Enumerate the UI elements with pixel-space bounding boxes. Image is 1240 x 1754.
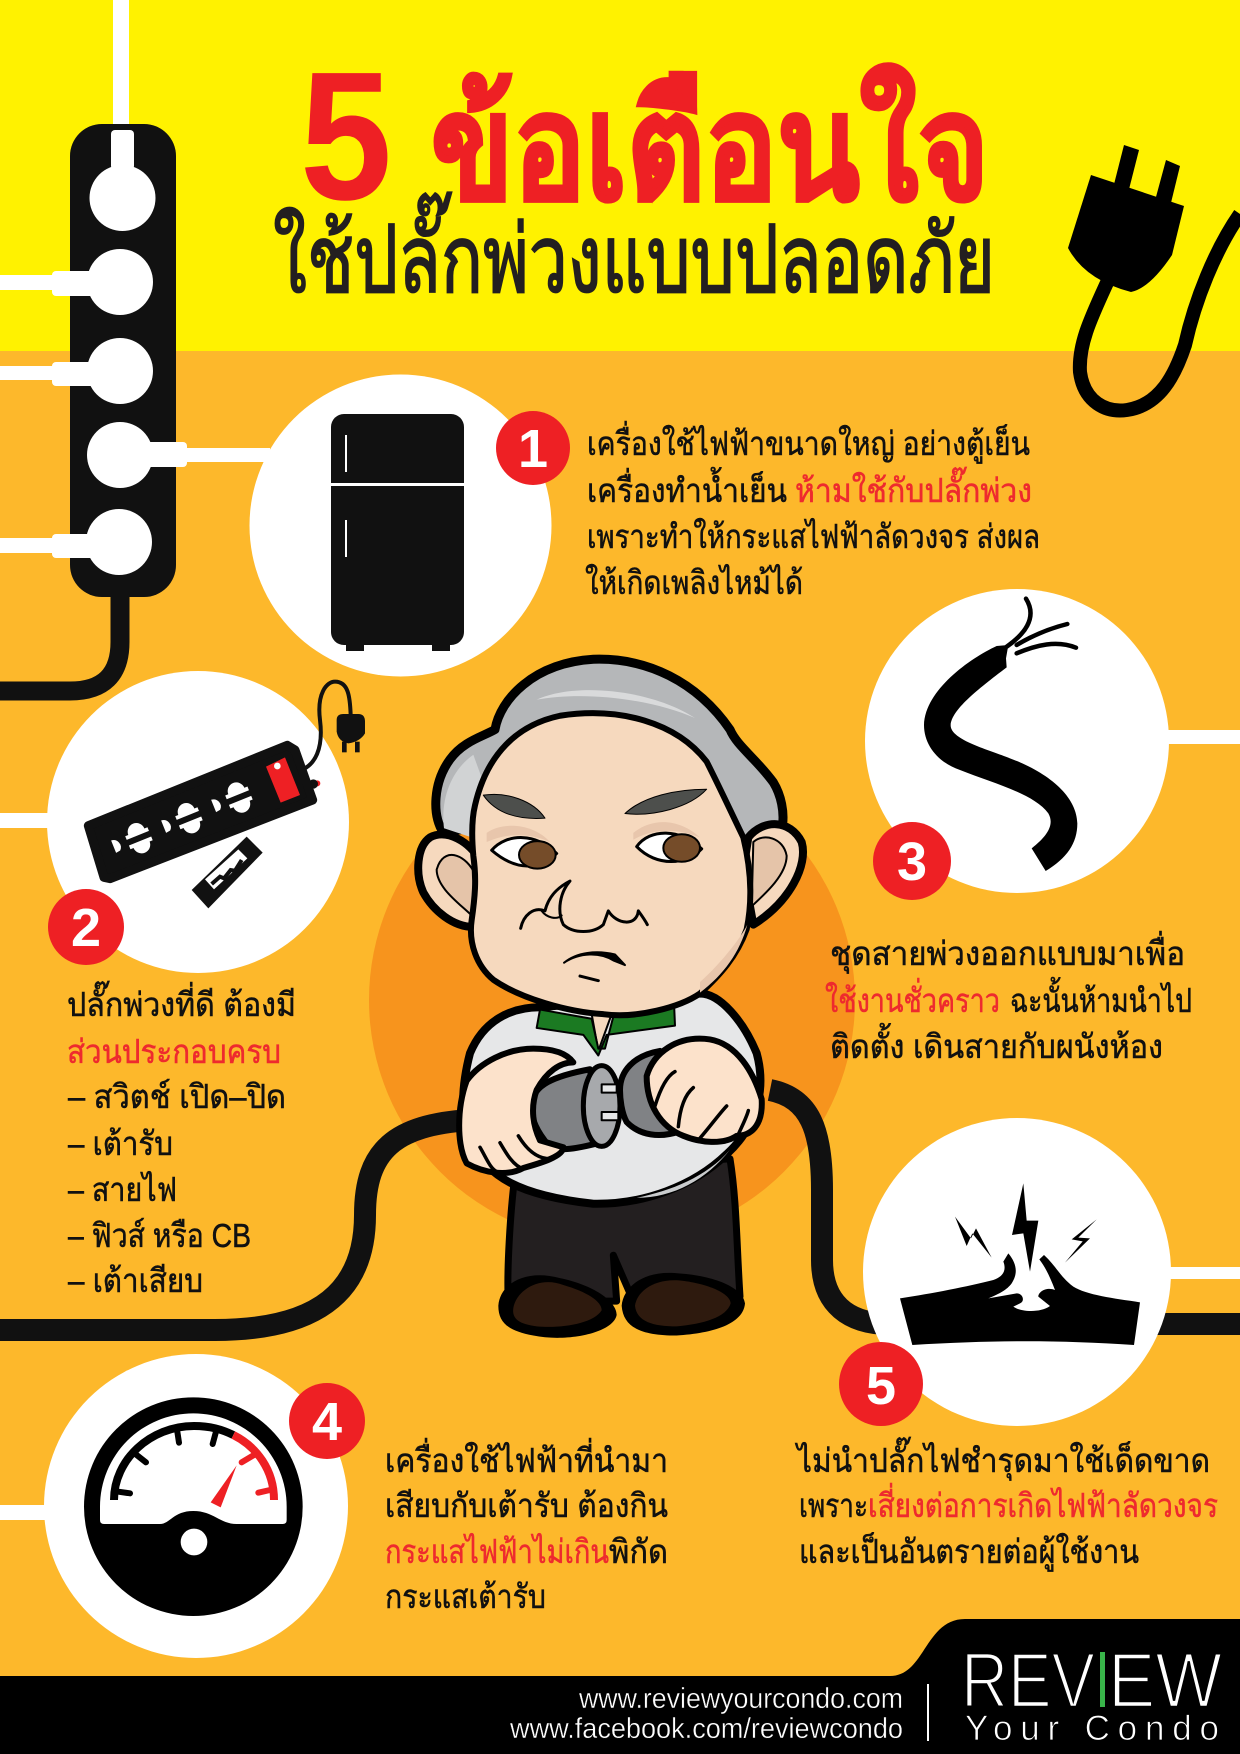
- orange circle behind character: [369, 757, 855, 1243]
- icon: power strip with five plugs: [0, 0, 270, 597]
- title: [273, 33, 995, 312]
- panel 5: broken cable circle: [839, 1118, 1171, 1426]
- text block 5: ไม่นำปลั๊กไฟชำรุดมาใช้เด็ดขาด: [794, 1436, 1210, 1481]
- logo: REVIEW Your Condo: REV: [961, 1636, 1095, 1724]
- text block 4: กระแสไฟฟ้าไม่เกิน: [385, 1533, 609, 1570]
- text block 1: ห้ามใช้กับปลั๊กพ่วง: [795, 466, 1032, 509]
- icon: extension strip and fuse: [88, 682, 365, 908]
- badge 3: 3: [897, 832, 927, 892]
- text block 1: เครื่องทำน้ำเย็น: [587, 467, 787, 509]
- footer links: www.reviewyourcondo.com: [578, 1683, 903, 1715]
- text block 3: [825, 931, 1192, 1065]
- icon: broken cable with sparks: [900, 1183, 1140, 1345]
- panel 4: gauge circle: [44, 1354, 365, 1658]
- icon: gauge: [84, 1397, 303, 1616]
- badge 1: 1: [518, 419, 548, 479]
- badge 5: 5: [866, 1356, 896, 1416]
- text block 2: [67, 980, 296, 1299]
- right cable: [770, 1090, 1240, 1324]
- footer links: [509, 1683, 903, 1745]
- badge 2: [48, 889, 124, 965]
- text block 5: เพราะ: [799, 1487, 868, 1524]
- badge 3: [873, 822, 951, 900]
- badge 4: [289, 1383, 365, 1459]
- cable from power strip: [0, 597, 120, 691]
- text block 3: ชุดสายพ่วงออกแบบมาเพื่อ: [830, 931, 1185, 974]
- text block 2: – สายไฟ: [68, 1171, 177, 1208]
- icon: wall plug top right: [1068, 145, 1240, 410]
- icon: frayed wire: [924, 599, 1077, 871]
- text block 2: – สวิตช์ เปิด–ปิด: [68, 1078, 286, 1115]
- text block 3: ใช้งานชั่วคราว: [825, 978, 1000, 1019]
- text block 4: เสียบกับเต้ารับ ต้องกิน: [385, 1487, 668, 1524]
- footer band: [0, 1619, 1240, 1754]
- logo: REVIEW Your Condo: Your Condo: [965, 1709, 1219, 1748]
- badge 2: 2: [71, 898, 101, 958]
- title: ใช้ปลั๊กพ่วงแบบปลอดภัย: [273, 192, 995, 312]
- icon: refrigerator: [331, 414, 464, 651]
- footer divider: [927, 1684, 929, 1741]
- connector lines to circles 2 to 5: [0, 730, 1240, 1520]
- text block 2: – ฟิวส์ หรือ CB: [68, 1217, 251, 1254]
- badge 5: [839, 1342, 923, 1426]
- panel 2: power strip circle: [47, 671, 365, 973]
- text block 5: และเป็นอันตรายต่อผู้ใช้งาน: [799, 1532, 1139, 1572]
- logo: REVIEW Your Condo: EW: [1108, 1636, 1222, 1724]
- panel 3: frayed wire circle: [865, 589, 1169, 900]
- text block 2: ปลั๊กพ่วงที่ดี ต้องมี: [67, 980, 296, 1023]
- text block 1: เพราะทำให้กระแสไฟฟ้าลัดวงจร ส่งผล: [587, 518, 1040, 555]
- text block 1: เครื่องใช้ไฟฟ้าขนาดใหญ่ อย่างตู้เย็น: [587, 421, 1030, 464]
- text block 4: กระแสเต้ารับ: [385, 1578, 546, 1615]
- text block 3: ติดตั้ง เดินสายกับผนังห้อง: [830, 1023, 1163, 1065]
- text block 4: [385, 1438, 668, 1615]
- footer links: www.facebook.com/reviewcondo: [509, 1713, 903, 1745]
- left cable: [0, 1120, 470, 1330]
- text block 1: ให้เกิดเพลิงไหม้ได้: [585, 564, 803, 601]
- logo: REVIEW Your Condo: [961, 1636, 1222, 1748]
- text block 4: พิกัด: [609, 1533, 668, 1570]
- text block 5: [794, 1436, 1218, 1572]
- text block 1: [585, 421, 1040, 601]
- title: 5: [300, 33, 392, 238]
- text block 3: ฉะนั้นห้ามนำไป: [1010, 977, 1192, 1019]
- panel 1: refrigerator: [250, 374, 570, 676]
- badge 1: [496, 411, 570, 485]
- text block 2: – เต้ารับ: [68, 1125, 173, 1162]
- text block 4: เครื่องใช้ไฟฟ้าที่นำมา: [385, 1438, 668, 1479]
- text block 2: ส่วนประกอบครบ: [67, 1033, 281, 1070]
- character: old man holding plug: [418, 659, 803, 1338]
- text block 2: – เต้าเสียบ: [68, 1262, 203, 1299]
- title: ข้อเตือนใจ: [431, 63, 989, 231]
- badge 4: 4: [312, 1392, 342, 1452]
- header band: yellow: [0, 0, 1240, 351]
